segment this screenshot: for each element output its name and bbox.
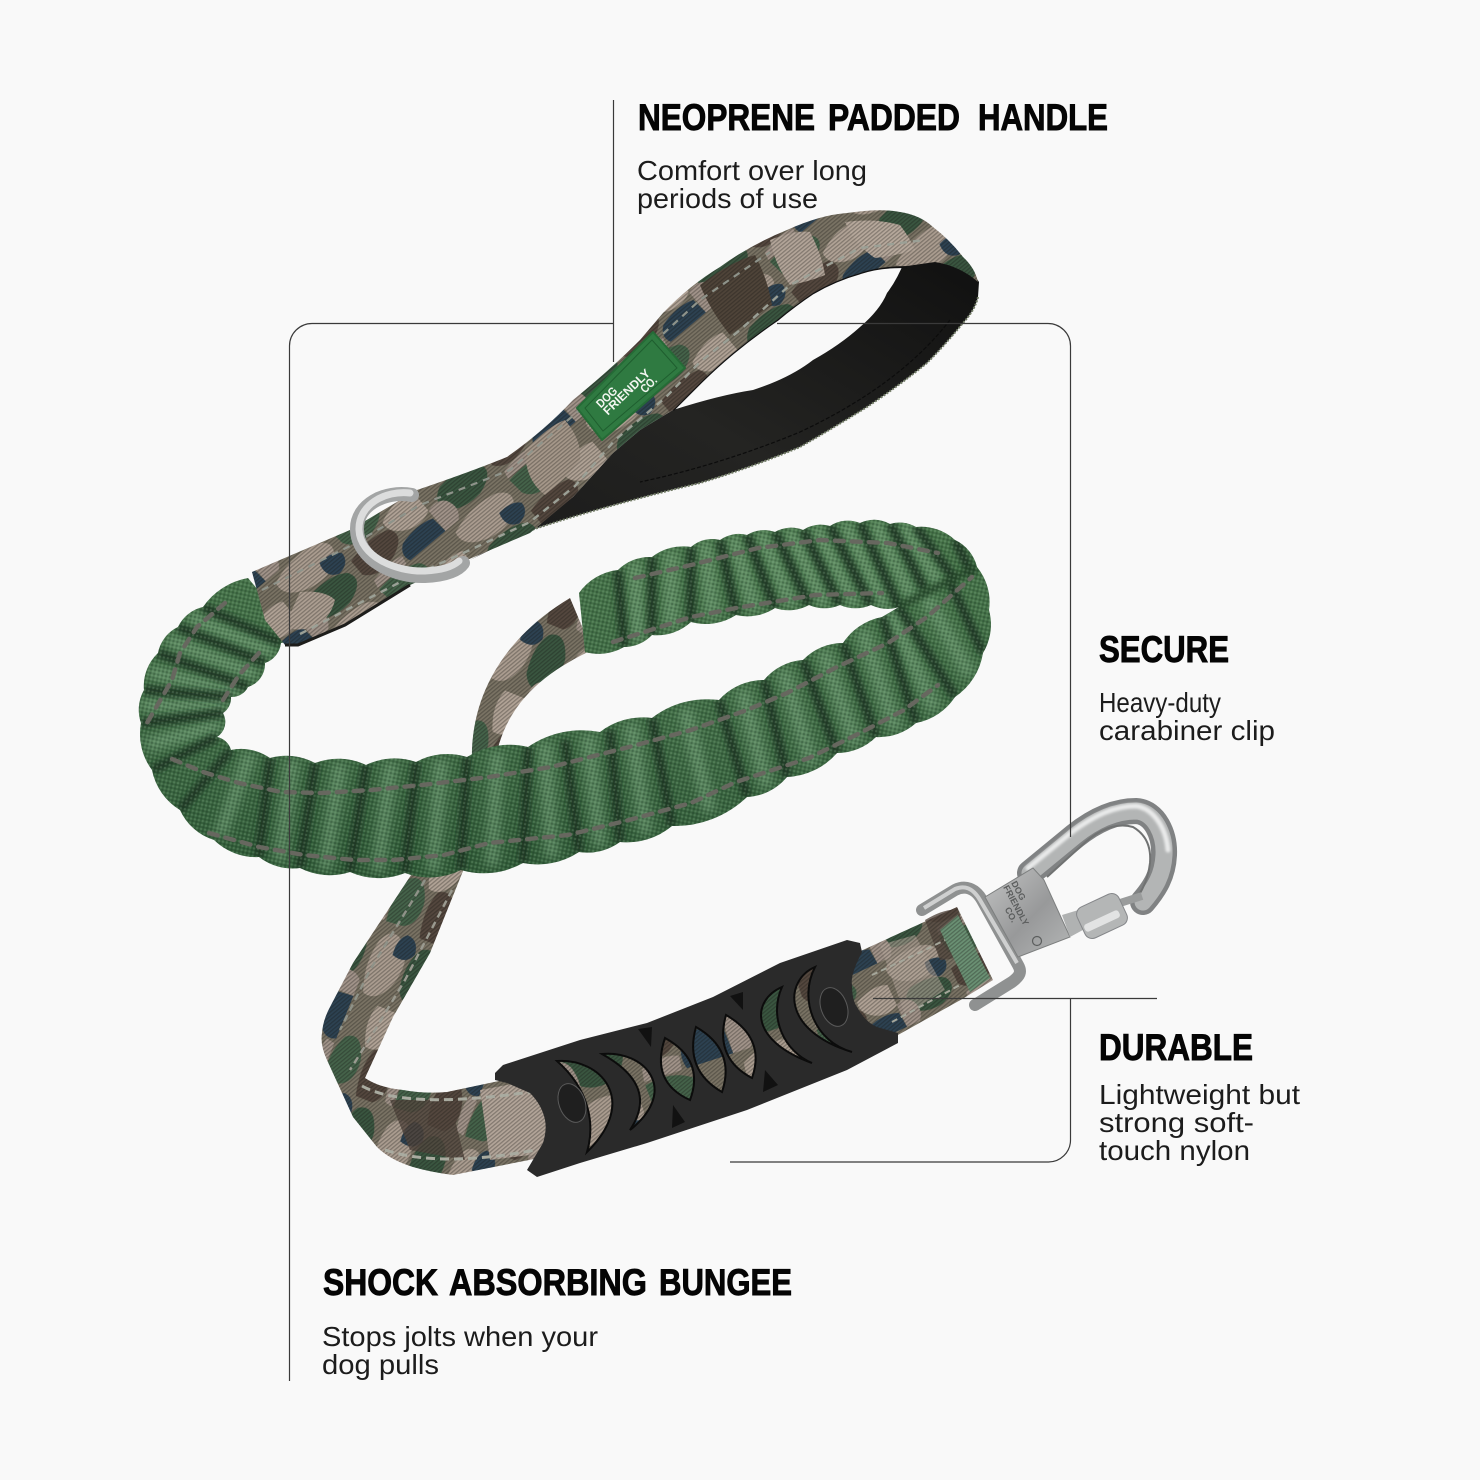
gate and barrel (1062, 908, 1092, 937)
callout: neoprene padded handle (637, 97, 1108, 214)
carabiner clip: FRIENDLY (1001, 883, 1031, 927)
upper camo strap and handle (252, 210, 978, 645)
woven brand label (577, 332, 685, 440)
callout: neoprene padded handle: Comfort over long (637, 155, 867, 186)
neoprene padded inner handle (470, 255, 979, 560)
bungee section (130, 510, 1000, 890)
black rubber traffic grip (495, 940, 898, 1177)
woven brand label: CO. (637, 373, 660, 396)
callout: shock absorbing bungee: ABSORBING (449, 1262, 647, 1303)
callout connector lines (290, 100, 1157, 1381)
callout: secure (1099, 629, 1275, 746)
hook (1030, 811, 1164, 902)
carabiner clip: CO. (1003, 905, 1019, 924)
callout: neoprene padded handle: PADDED (828, 97, 960, 138)
callout: neoprene padded handle: periods of use (637, 183, 818, 214)
woven brand label: DOG (593, 384, 620, 411)
carabiner clip (922, 806, 1168, 1005)
callout: neoprene padded handle: HANDLE (978, 97, 1108, 138)
rectangular loop (922, 888, 1020, 1005)
callout: shock absorbing bungee: dog pulls (322, 1349, 439, 1380)
callout: shock absorbing bungee: SHOCK (323, 1262, 438, 1303)
callout: durable (1099, 1027, 1300, 1166)
callout: shock absorbing bungee (322, 1262, 792, 1380)
callout: secure: carabiner clip (1099, 715, 1275, 746)
callout: secure: SECURE (1099, 629, 1229, 670)
lower camo strap passing behind the bungee (322, 598, 592, 1175)
woven brand label: FRIENDLY (600, 366, 653, 418)
callout: durable: strong soft- (1099, 1107, 1254, 1138)
camo strap to clip (830, 907, 993, 1045)
callout: durable: touch nylon (1099, 1135, 1250, 1166)
callout: durable: Lightweight but (1099, 1079, 1300, 1110)
leash product illustration (130, 210, 1168, 1177)
callout: durable: DURABLE (1099, 1027, 1253, 1068)
carabiner clip: DOG (1009, 879, 1028, 902)
callout: neoprene padded handle: NEOPRENE (638, 97, 815, 138)
grip openings (557, 967, 852, 1152)
swivel plate (985, 868, 1070, 957)
D-ring (357, 493, 463, 576)
callout: shock absorbing bungee: BUNGEE (659, 1262, 792, 1303)
callout: shock absorbing bungee: Stops jolts when your (322, 1321, 598, 1352)
callout: secure: Heavy-duty (1099, 687, 1221, 718)
